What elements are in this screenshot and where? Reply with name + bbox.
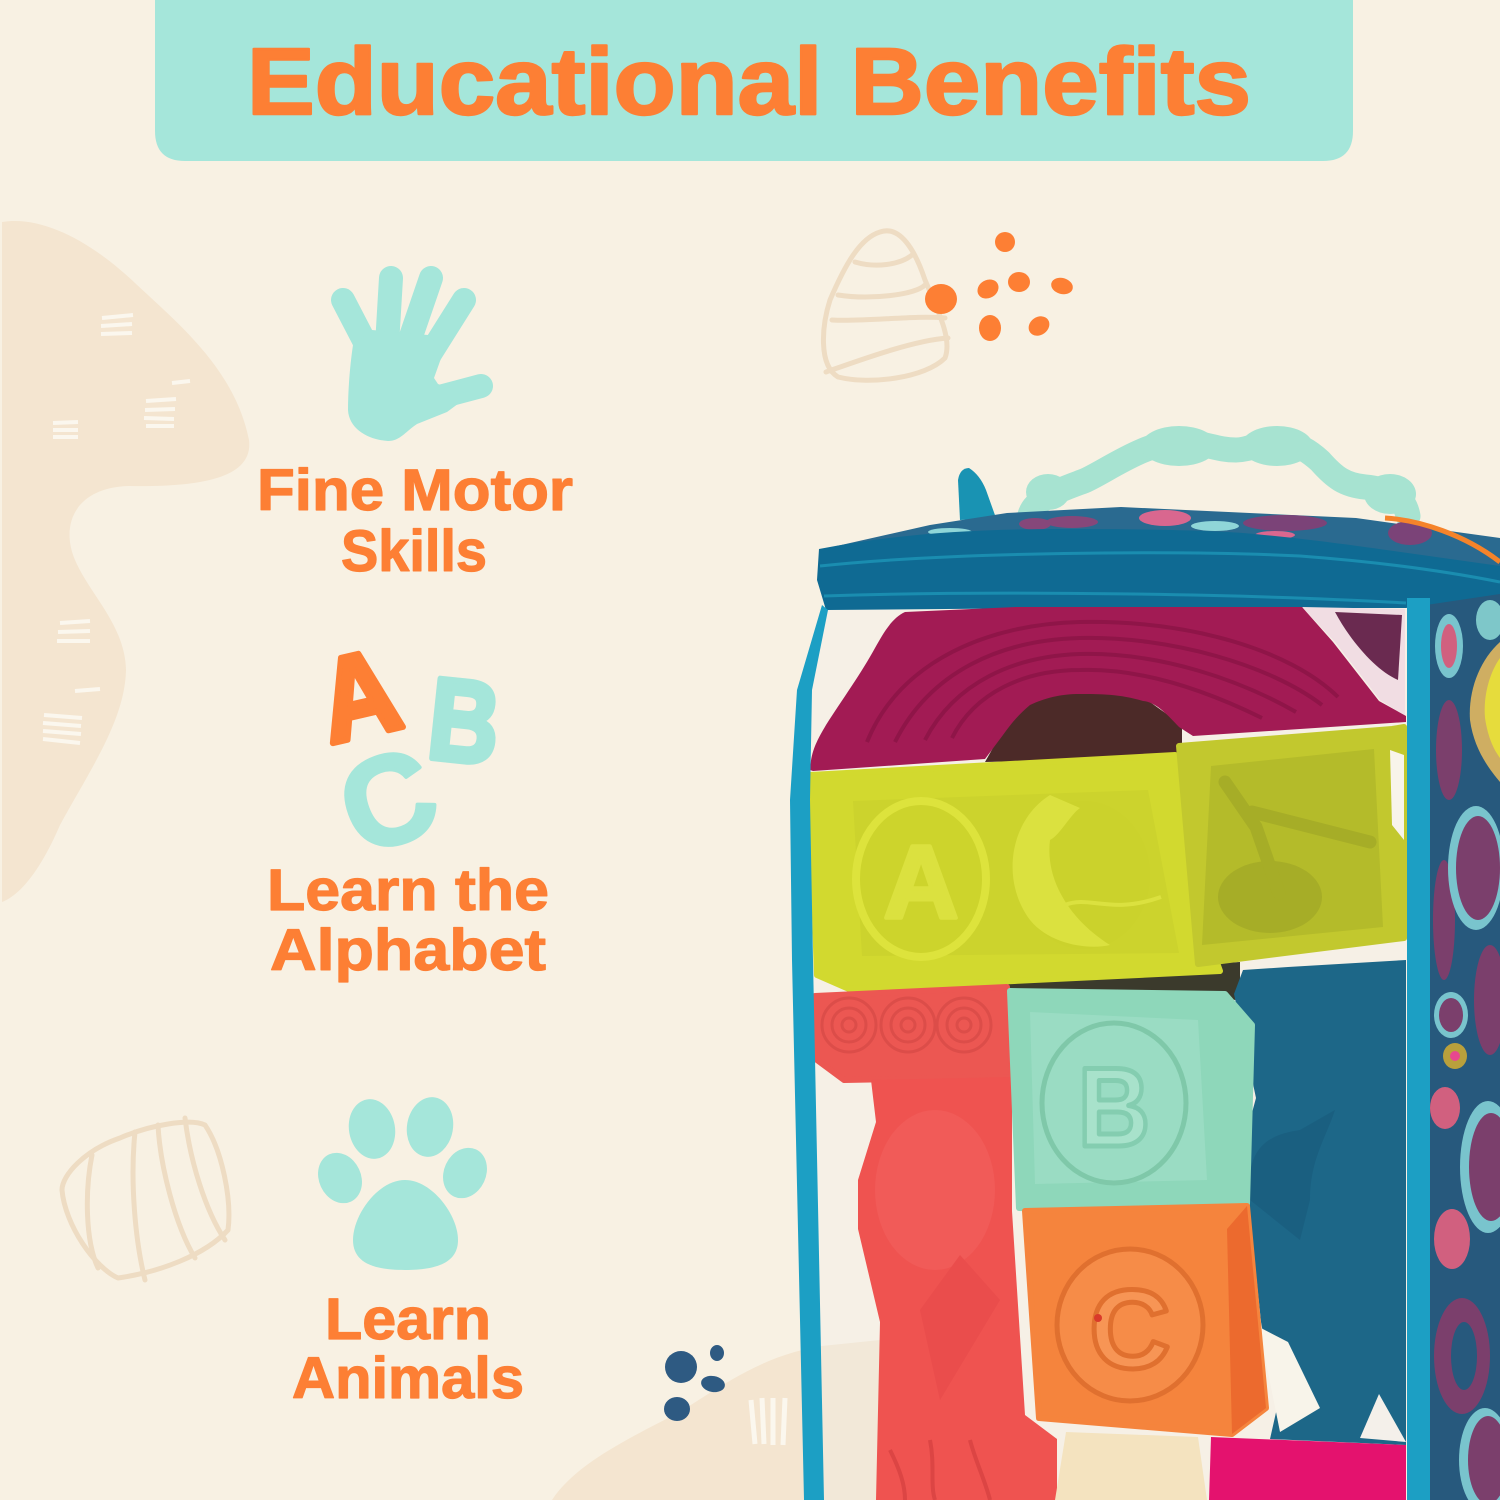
title banner: [155, 0, 1353, 161]
benefit: learn animals: [292, 1093, 524, 1411]
side fabric: [1408, 594, 1500, 1500]
dark gap under arch: [985, 690, 1182, 762]
vinyl highlight left of navy: [1259, 1327, 1320, 1432]
label: learn the alphabet: [267, 858, 549, 983]
product photo: bag of soft blocks: [790, 426, 1500, 1500]
orange block C: C: [1090, 1267, 1170, 1392]
zipper teeth: [820, 553, 1500, 603]
hang tag: [1470, 642, 1500, 782]
pink block bottom: [1209, 1437, 1406, 1500]
yellow block: letter A: [810, 755, 1220, 989]
cream block bottom: [1055, 1432, 1207, 1500]
icon: ABC letters: C: [321, 719, 455, 882]
red block top: [815, 987, 1012, 1080]
label: learn the alphabet: Alphabet: [270, 918, 546, 983]
orange block C: [1025, 1206, 1266, 1434]
decorative blob: left: [2, 221, 249, 902]
label: fine motor skills: [257, 458, 573, 584]
right piping: [1407, 598, 1430, 1500]
clear vinyl front: [800, 605, 1408, 1500]
icon: ABC letters: B: [423, 653, 506, 790]
teal tab: [958, 468, 996, 520]
mint block B: [1010, 991, 1252, 1213]
icon: paw print: [310, 1093, 495, 1270]
dark block gap: [1008, 962, 1240, 1000]
coral animal column: [858, 1077, 1057, 1500]
label: fine motor skills: Fine Motor: [257, 458, 573, 523]
blob seen through vinyl: [812, 1340, 880, 1500]
label: learn animals: [292, 1287, 524, 1411]
arch ridges: [867, 622, 1338, 742]
decorative dots: navy: [664, 1345, 726, 1421]
yellow block: bird: [1179, 727, 1404, 964]
doodle: striped shell top: [823, 231, 948, 380]
vinyl reflection: [1302, 607, 1405, 716]
mint block B: B: [1078, 1045, 1150, 1170]
block reflection: [1390, 750, 1404, 840]
benefit: fine motor skills: [257, 278, 573, 584]
decorative dots: orange: [925, 232, 1075, 341]
zipper band: [817, 529, 1500, 610]
label: fine motor skills: Skills: [341, 519, 487, 584]
doodle: striped shell bottom: [62, 1118, 229, 1280]
maroon rainbow arch block: [810, 607, 1406, 771]
label: learn the alphabet: Learn the: [267, 858, 549, 923]
bag top fabric: [819, 507, 1500, 570]
handle: [1026, 426, 1416, 516]
title: Educational Benefits: [247, 29, 1251, 135]
side fabric paisley: [1430, 600, 1500, 1500]
icon: ABC letters: A: [306, 623, 412, 769]
dark reflection: [1335, 612, 1402, 680]
icon: hand: [343, 278, 481, 441]
benefit: learn the alphabet: [267, 623, 549, 983]
vinyl highlight right of navy: [1360, 1394, 1406, 1442]
orange ribbon: [1385, 518, 1500, 562]
yellow block: letter A: A: [883, 825, 959, 941]
decorative blob: bottom: [552, 1340, 900, 1500]
fabric pattern: [928, 510, 1432, 545]
navy column: [1234, 960, 1406, 1445]
icon: ABC letters: [306, 623, 506, 882]
label: learn animals: Animals: [292, 1346, 524, 1411]
hang tag inner: [1485, 658, 1500, 758]
label: learn animals: Learn: [325, 1287, 491, 1352]
teal piping: [790, 605, 828, 1500]
